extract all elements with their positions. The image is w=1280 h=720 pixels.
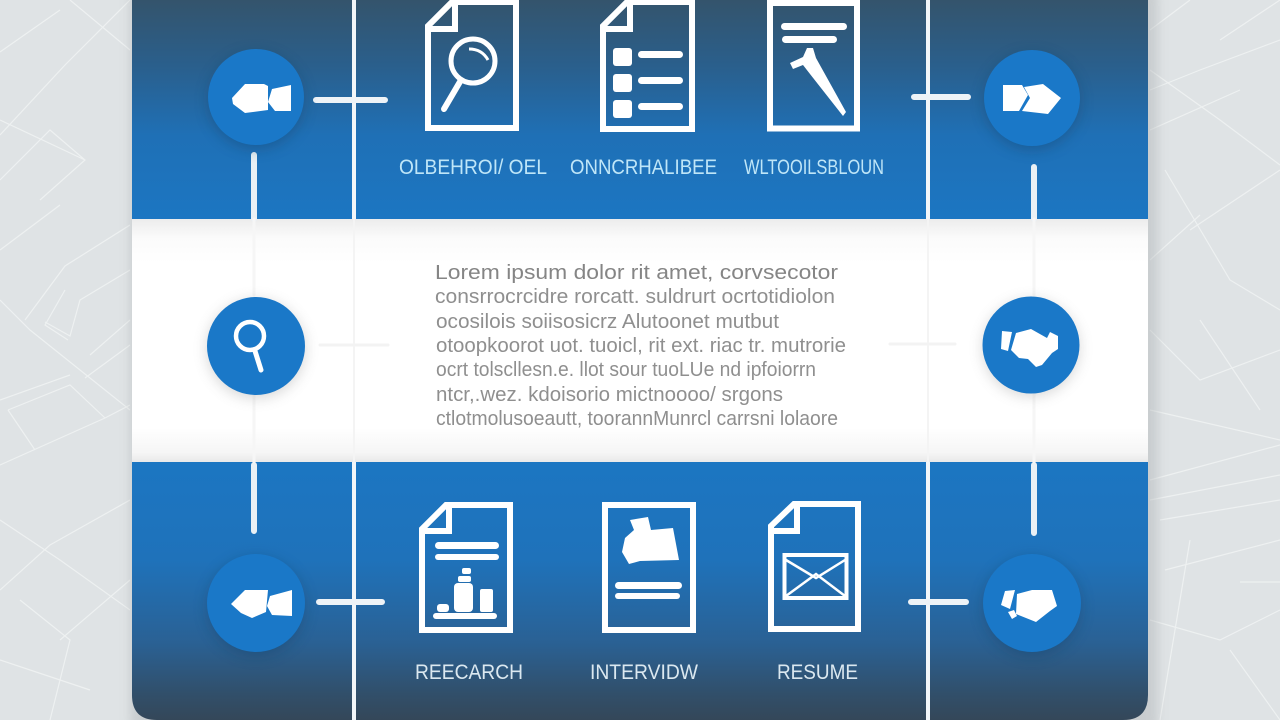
label: resume: RESUME: [777, 661, 858, 684]
icon: document with envelope: [771, 504, 858, 629]
icon: middle-left magnifier circle: [207, 297, 305, 398]
body text block: ctlotmolusoeautt, toorannMunrcl carrsni lolaore: [436, 408, 838, 430]
icon: document with magnifier: [428, 2, 516, 128]
panel: top blue band: [132, 0, 1148, 219]
body text block: consrrocrcidre rorcatt. suldrurt ocrtotidiolon: [435, 286, 835, 308]
vertical divider lines: [352, 0, 930, 720]
icon: top-left circle with left arrow: [208, 49, 304, 149]
body text block: ntcr,.wez. kdoisorio mictnoooo/ srgons: [436, 384, 783, 406]
body text block: Lorem ipsum dolor rit amet, corvsecotor: [435, 262, 838, 284]
label: research: REECARCH: [415, 661, 523, 684]
body text block: ocosilois soiisosicrz Alutoonet mutbut: [436, 311, 779, 333]
body text block: otoopkoorot uot. tuoicl, rit ext. riac tr. mutrorie: [436, 335, 846, 357]
body text block: [435, 262, 846, 430]
connector lines: [254, 97, 1034, 602]
label: interview: INTERVIDW: [590, 661, 698, 684]
icon: document with checklist: [603, 2, 692, 129]
icon: document with tool: [770, 3, 857, 128]
panel: central white band: [132, 219, 1148, 462]
icon: bottom-left circle with left arrow: [207, 554, 305, 656]
body text block: ocrt tolscllesn.e. llot sour tuoLUe nd ipfoiorrn: [436, 359, 816, 381]
icon: document with bar chart: [422, 505, 510, 630]
icon: document with portrait: [605, 505, 693, 630]
label: third top document: WLTOOILSBLOUN: [744, 156, 884, 179]
icon: middle-right handshake circle: [982, 296, 1080, 396]
label: second top document: ONNCRHALIBEE: [570, 156, 717, 179]
label: first top document: OLBEHROI/ OEL: [399, 156, 547, 179]
icon: top-right circle with right arrow: [984, 50, 1080, 150]
panel: bottom blue band: [132, 462, 1148, 720]
icon: bottom-right handshake circle: [983, 554, 1081, 656]
